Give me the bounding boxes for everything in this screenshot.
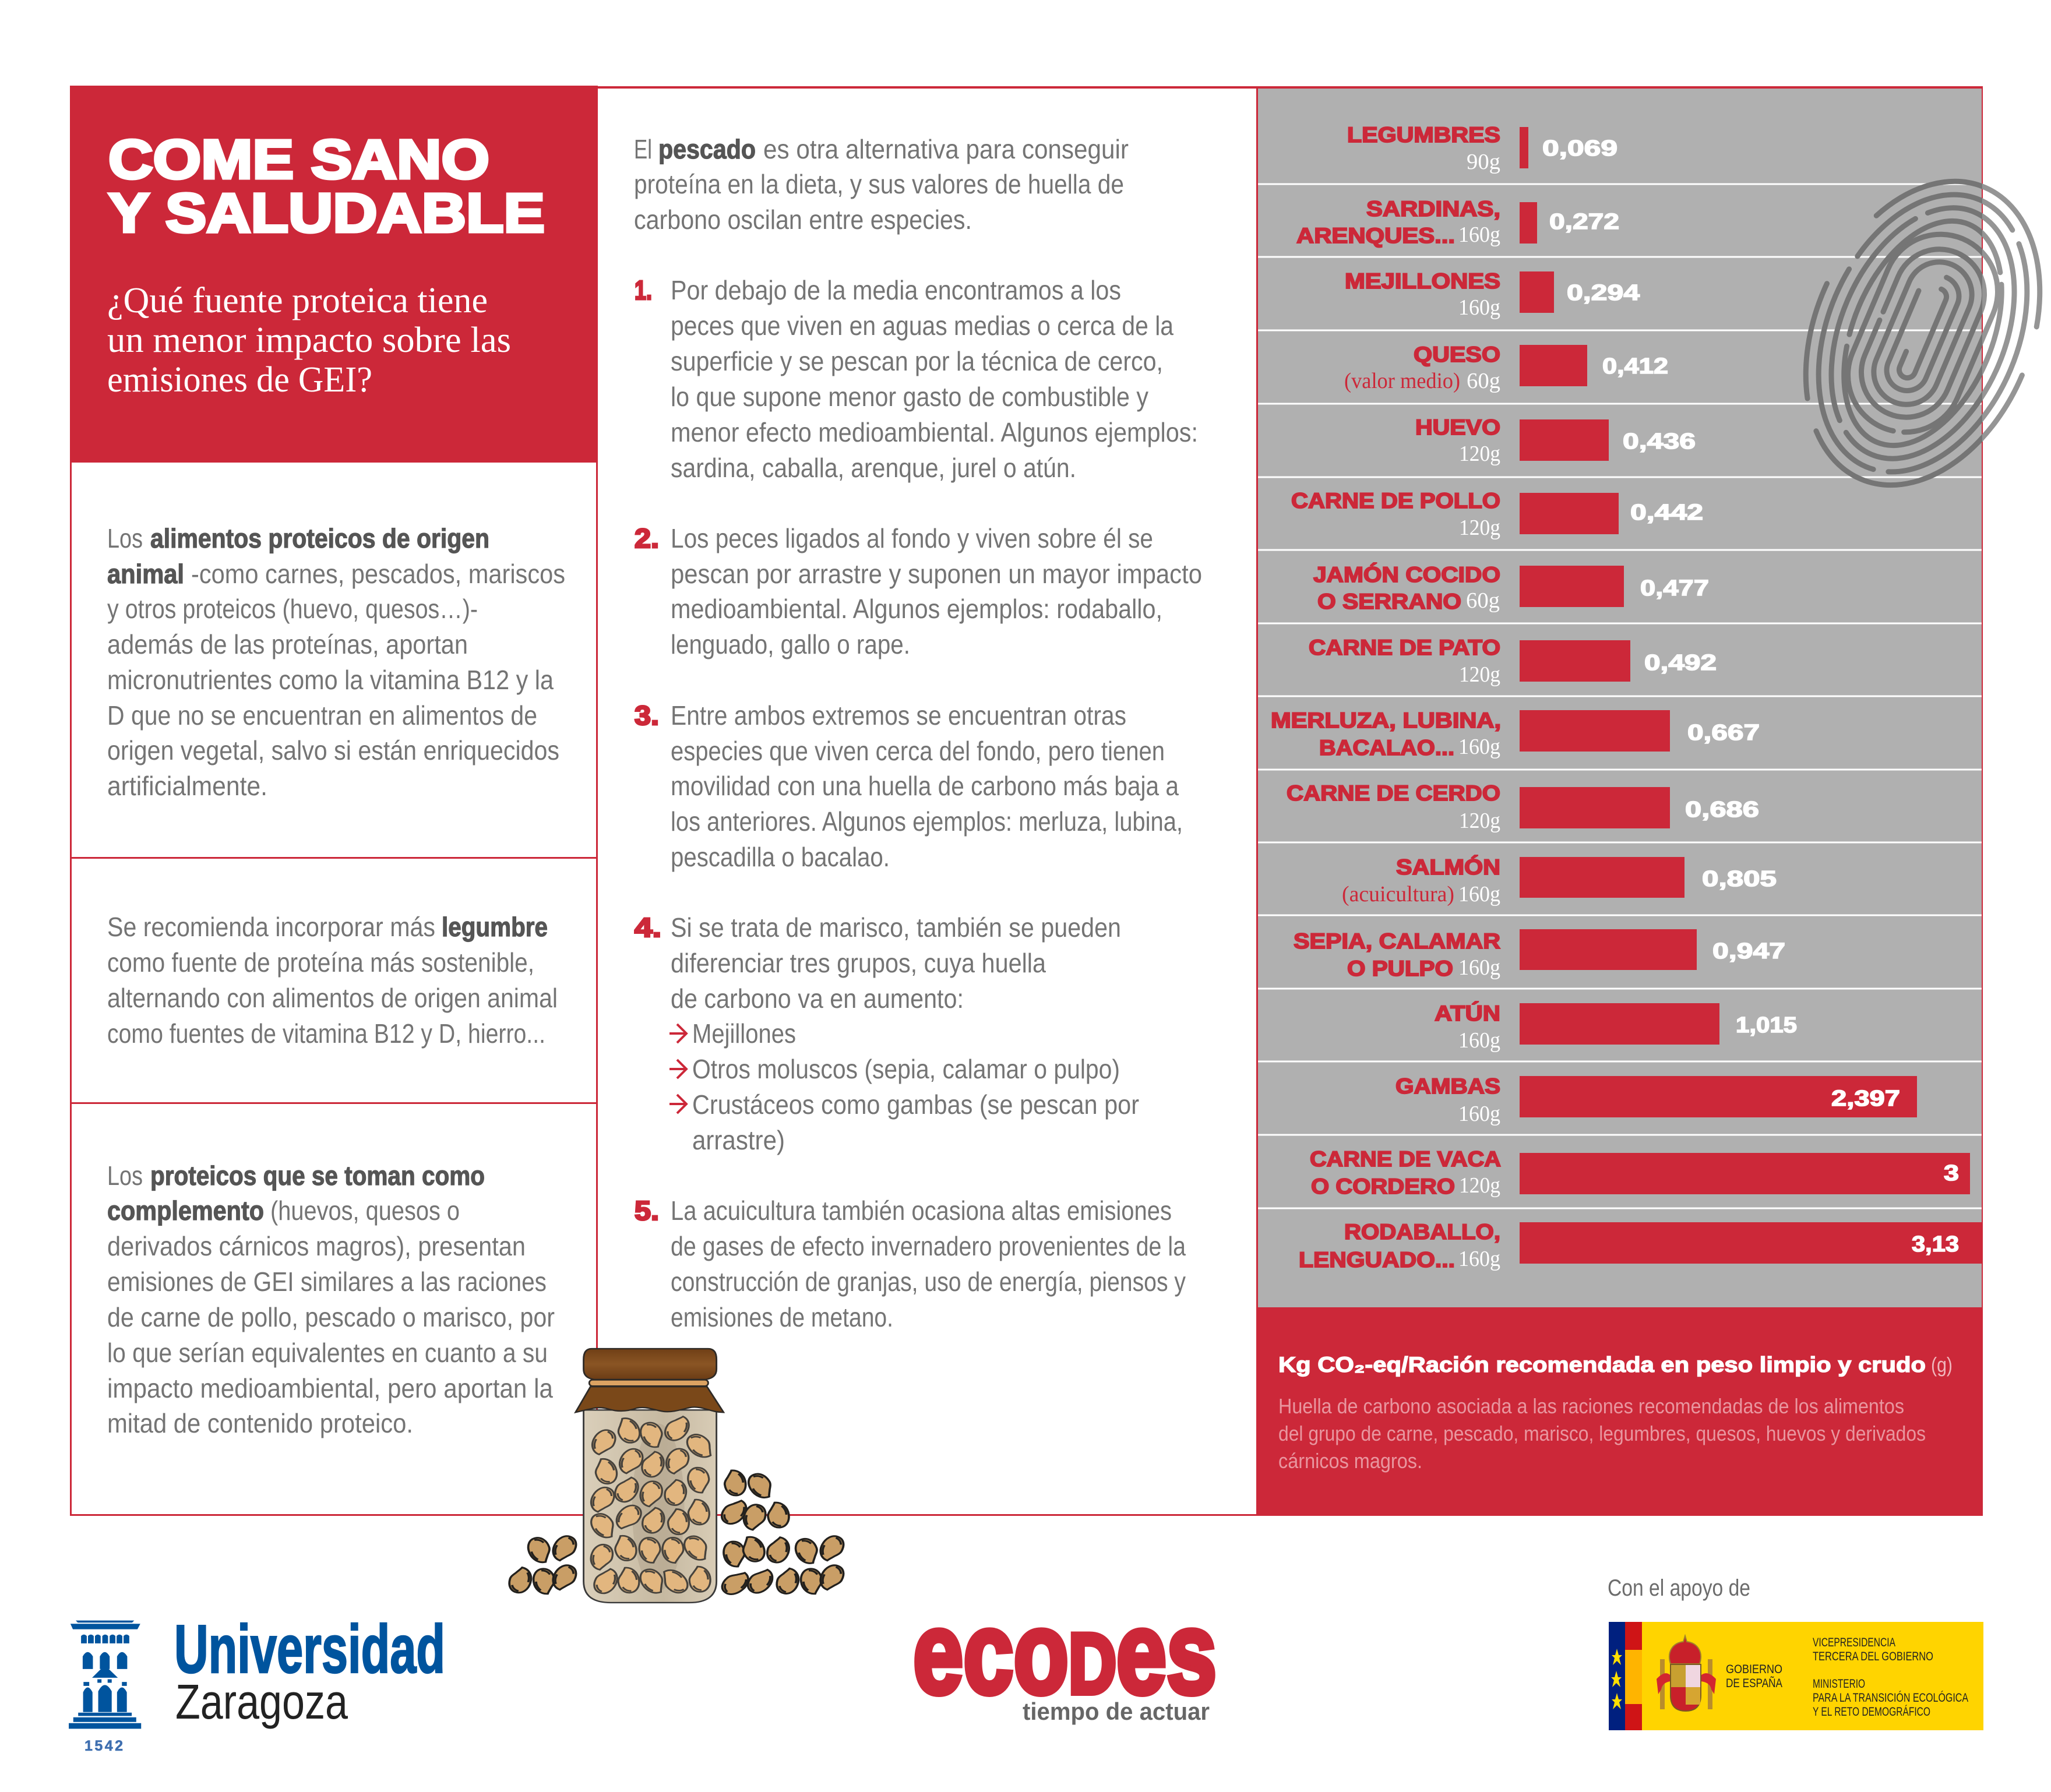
food labels: 160g: [1458, 223, 1500, 247]
cloth lid: [584, 1349, 717, 1380]
bar chart bars: [1520, 127, 1982, 1264]
text block: legumbre recommendation: como fuente de proteína más sostenible,: [107, 947, 534, 978]
list item 1: peces que viven en aguas medias o cerca de la: [671, 311, 1173, 341]
bar values: 0,686: [1685, 798, 1759, 822]
text block: alimentos proteicos de origen animal: y otros proteicos (huevo, quesos…)-: [107, 594, 478, 624]
text block: proteicos como complemento: lo que serían equivalentes en cuanto a su: [107, 1338, 548, 1368]
food labels: CARNE DE VACA: [1310, 1147, 1501, 1171]
list item 3: 3.: [635, 700, 659, 731]
food labels: HUEVO: [1415, 415, 1500, 439]
list item 5: construcción de granjas, uso de energía, piensos y: [671, 1267, 1186, 1297]
food labels: 160g: [1458, 1102, 1500, 1126]
text block: proteicos como complemento: (huevos, quesos o: [270, 1195, 460, 1226]
food labels: O PULPO: [1347, 957, 1453, 980]
food labels: (valor medio): [1344, 369, 1460, 393]
jar body: [584, 1410, 717, 1603]
list item 5: emisiones de metano.: [671, 1302, 893, 1332]
text block: pescado intro: pescado: [658, 134, 756, 164]
text block: proteicos como complemento: proteicos que se toman como: [150, 1160, 485, 1191]
icon: tower: [69, 1621, 141, 1728]
list item 1: 1.: [635, 275, 652, 305]
food labels: O CORDERO: [1311, 1174, 1455, 1198]
text block: alimentos proteicos de origen animal: -como carnes, pescados, mariscos: [191, 559, 565, 589]
text block: legumbre recommendation: alternando con alimentos de origen animal: [107, 983, 558, 1013]
food labels: CARNE DE CERDO: [1287, 781, 1500, 805]
string band: [589, 1380, 708, 1386]
text block: pescado intro: proteína en la dieta, y sus valores de huella de: [634, 169, 1124, 199]
list item 1: lo que supone menor gasto de combustible y: [671, 382, 1148, 412]
bar values: 3,13: [1912, 1232, 1959, 1257]
subtitle question: ¿Qué fuente proteica tiene: [107, 281, 488, 320]
bar values: 3: [1944, 1161, 1959, 1186]
food labels: 160g: [1458, 882, 1500, 906]
bar values: 0,947: [1712, 939, 1785, 964]
food labels: 160g: [1458, 295, 1500, 320]
text block: alimentos proteicos de origen animal: alimentos proteicos de origen: [150, 523, 489, 553]
government label: TERCERA DEL GOBIERNO: [1813, 1650, 1933, 1663]
list item 2: Los peces ligados al fondo y viven sobre él se: [671, 523, 1153, 553]
food labels: BACALAO...: [1319, 736, 1454, 760]
food labels: SEPIA, CALAMAR: [1294, 929, 1500, 953]
logo: Universidad Zaragoza: Zaragoza: [175, 1674, 348, 1729]
loose chickpeas: [508, 1469, 847, 1598]
text block: alimentos proteicos de origen animal: además de las proteínas, aportan: [107, 629, 468, 659]
text block: alimentos proteicos de origen animal: [107, 523, 565, 801]
text block: alimentos proteicos de origen animal: animal: [107, 559, 184, 589]
government label: GOBIERNO: [1726, 1663, 1782, 1676]
panel: chart legend: [1256, 1307, 1983, 1516]
text block: legumbre recommendation: legumbre: [442, 912, 548, 942]
text block: proteicos como complemento: Los: [107, 1160, 143, 1191]
legend description: del grupo de carne, pescado, marisco, legumbres, quesos, huevos y derivados: [1278, 1421, 1926, 1445]
food labels: SARDINAS,: [1366, 197, 1500, 221]
subtitle question: [107, 281, 511, 400]
food labels: [1271, 123, 1501, 1272]
food labels: 60g: [1467, 369, 1500, 393]
legend description: Huella de carbono asociada a las raciones recomendadas de los alimentos: [1278, 1394, 1904, 1418]
bar values: 2,397: [1831, 1087, 1900, 1111]
text block: proteicos como complemento: derivados cárnicos magros), presentan: [107, 1231, 526, 1261]
food labels: 60g: [1466, 588, 1500, 613]
list item 5: 5.: [635, 1195, 659, 1226]
text block: pescado intro: es otra alternativa para conseguir: [763, 134, 1129, 164]
food labels: ATÚN: [1435, 1001, 1500, 1025]
coat of arms: [1657, 1636, 1716, 1711]
panel: bar chart background: [1256, 86, 1983, 1310]
bar values: 0,477: [1640, 576, 1709, 601]
list item 5: [635, 1195, 1186, 1332]
list item 5: de gases de efecto invernadero provenientes de la: [671, 1231, 1186, 1261]
list item 1: superficie y se pescan por la técnica de cerco,: [671, 346, 1163, 376]
food labels: 160g: [1458, 735, 1500, 759]
list item 2: medioambiental. Algunos ejemplos: rodaballo,: [671, 594, 1162, 624]
panel: red header: [70, 86, 598, 463]
list item 4: 4.: [635, 912, 661, 943]
food labels: 160g: [1458, 1028, 1500, 1053]
food labels: CARNE DE PATO: [1309, 636, 1500, 659]
list item 4: arrastre): [692, 1125, 785, 1155]
food labels: GAMBAS: [1395, 1074, 1500, 1098]
food labels: CARNE DE POLLO: [1291, 489, 1500, 513]
legend title: Kg CO₂-eq/Ración recomendada en peso limpio y crudo: [1278, 1353, 1926, 1377]
logo: Universidad Zaragoza: [69, 1611, 445, 1754]
list item 4: [635, 912, 1139, 1155]
list item 2: 2.: [635, 523, 659, 553]
list item 2: lenguado, gallo o rape.: [671, 629, 910, 659]
title: Y SALUDABLE: [108, 182, 545, 244]
text block: alimentos proteicos de origen animal: Los: [107, 523, 143, 553]
food labels: 120g: [1459, 662, 1500, 687]
text block: pescado intro: [634, 134, 1129, 235]
list item 4: Si se trata de marisco, también se pueden: [671, 912, 1121, 943]
list item 4: Mejillones: [692, 1018, 796, 1049]
legend description: cárnicos magros.: [1278, 1449, 1422, 1473]
bar values: [1542, 136, 1959, 1257]
food labels: 120g: [1459, 809, 1500, 833]
text block: pescado intro: carbono oscilan entre especies.: [634, 204, 972, 235]
text block: proteicos como complemento: complemento: [107, 1195, 264, 1226]
bar values: 0,272: [1549, 210, 1619, 234]
government label: [1726, 1636, 1968, 1719]
text block: alimentos proteicos de origen animal: origen vegetal, salvo si están enriquecidos: [107, 735, 559, 766]
wordmark: ecoDes: [913, 1588, 1217, 1717]
chickpeas inside jar: [586, 1413, 718, 1597]
list item 2: pescan por arrastre y suponen un mayor impacto: [671, 559, 1202, 589]
text block: legumbre recommendation: Se recomienda incorporar más: [107, 912, 435, 942]
government label: Y EL RETO DEMOGRÁFICO: [1813, 1705, 1930, 1719]
logo: Gobierno de España: [1609, 1622, 1983, 1730]
list item 4: Crustáceos como gambas (se pescan por: [692, 1089, 1139, 1120]
icon: fingerprint: [1803, 178, 2043, 488]
bar values: 0,492: [1644, 651, 1717, 675]
bar values: 0,436: [1623, 429, 1696, 454]
food labels: 90g: [1467, 150, 1500, 174]
food labels: (acuicultura): [1342, 882, 1454, 906]
food labels: 120g: [1459, 442, 1500, 466]
list item 3: movilidad con una huella de carbono más baja a: [671, 771, 1179, 801]
panel: left column frame: [70, 463, 1259, 1516]
darker glass centre: [632, 1424, 685, 1591]
bar values: 0,805: [1702, 867, 1777, 891]
subtitle question: un menor impacto sobre las: [107, 320, 511, 360]
text block: proteicos como complemento: [107, 1160, 555, 1438]
bar values: 0,412: [1602, 354, 1668, 379]
title: [108, 129, 545, 244]
legend description: [1278, 1394, 1926, 1473]
list item 4: de carbono va en aumento:: [671, 983, 964, 1014]
government label: DE ESPAÑA: [1726, 1676, 1782, 1690]
bar values: 0,069: [1542, 136, 1617, 161]
text block: pescado intro: El: [634, 134, 652, 164]
illustration: chickpea jar: [508, 1349, 847, 1603]
food labels: ARENQUES...: [1296, 224, 1455, 248]
list item 1: sardina, caballa, arenque, jurel o atún.: [671, 453, 1076, 483]
text block: legumbre recommendation: [107, 912, 558, 1049]
text block: alimentos proteicos de origen animal: artificialmente.: [107, 771, 267, 801]
list item 3: Entre ambos extremos se encuentran otras: [671, 700, 1126, 731]
government label: MINISTERIO: [1813, 1677, 1865, 1691]
tagline: tiempo de actuar: [1023, 1698, 1210, 1725]
bar values: 1,015: [1736, 1013, 1797, 1038]
list item 3: [635, 700, 1183, 872]
bar values: 0,442: [1630, 500, 1703, 525]
food labels: QUESO: [1414, 343, 1500, 366]
list item 1: Por debajo de la media encontramos a los: [671, 275, 1121, 305]
food labels: RODABALLO,: [1344, 1220, 1500, 1244]
title: COME SANO: [108, 129, 489, 191]
food labels: MEJILLONES: [1345, 269, 1500, 293]
list item 5: La acuicultura también ocasiona altas emisiones: [671, 1195, 1172, 1226]
food labels: 120g: [1459, 1173, 1500, 1198]
list item 1: menor efecto medioambiental. Algunos ejemplos:: [671, 417, 1198, 447]
government label: VICEPRESIDENCIA: [1813, 1636, 1895, 1649]
wordmark: Universidad: [174, 1611, 445, 1687]
subtitle question: emisiones de GEI?: [107, 360, 372, 400]
list item 3: pescadilla o bacalao.: [671, 842, 890, 872]
text block: alimentos proteicos de origen animal: micronutrientes como la vitamina B12 y la: [107, 665, 554, 695]
panel: middle column top rule: [597, 86, 1259, 89]
list item 3: especies que viven cerca del fondo, pero tienen: [671, 736, 1165, 766]
cloth skirt: [576, 1387, 724, 1412]
list item 3: los anteriores. Algunos ejemplos: merluza, lubina,: [671, 806, 1183, 837]
text block: proteicos como complemento: de carne de pollo, pescado o marisco, por: [107, 1302, 555, 1332]
food labels: 120g: [1459, 516, 1500, 540]
text block: proteicos como complemento: mitad de contenido proteico.: [107, 1408, 413, 1438]
stars: [1611, 1649, 1622, 1709]
food labels: LEGUMBRES: [1347, 123, 1500, 147]
text block: proteicos como complemento: emisiones de GEI similares a las raciones: [107, 1267, 547, 1297]
icon: arrow bullets: [669, 1024, 686, 1113]
bar values: 0,667: [1687, 721, 1760, 745]
bar values: 0,294: [1567, 281, 1640, 305]
year: 1542: [84, 1738, 123, 1754]
text block: legumbre recommendation: como fuentes de vitamina B12 y D, hierro...: [107, 1018, 545, 1049]
list item 1: [635, 275, 1198, 483]
food labels: JAMÓN COCIDO: [1313, 562, 1500, 587]
government label: PARA LA TRANSICIÓN ECOLÓGICA: [1813, 1691, 1968, 1705]
text block: proteicos como complemento: impacto medioambiental, pero aportan la: [107, 1373, 553, 1403]
bar chart: [1271, 123, 1982, 1272]
food labels: SALMÓN: [1396, 855, 1500, 879]
logo: ecodes: [913, 1588, 1217, 1725]
text block: alimentos proteicos de origen animal: D que no se encuentran en alimentos de: [107, 700, 537, 731]
support caption: Con el apoyo de: [1608, 1575, 1750, 1601]
list item 2: [635, 523, 1202, 659]
food labels: MERLUZA, LUBINA,: [1271, 708, 1501, 732]
legend unit: (g): [1931, 1353, 1953, 1377]
list item 4: Otros moluscos (sepia, calamar o pulpo): [692, 1054, 1120, 1084]
food labels: O SERRANO: [1317, 590, 1461, 613]
food labels: 160g: [1458, 1247, 1500, 1271]
list item 4: diferenciar tres grupos, cuya huella: [671, 948, 1046, 978]
food labels: LENGUADO...: [1299, 1248, 1455, 1272]
food labels: 160g: [1458, 955, 1500, 980]
